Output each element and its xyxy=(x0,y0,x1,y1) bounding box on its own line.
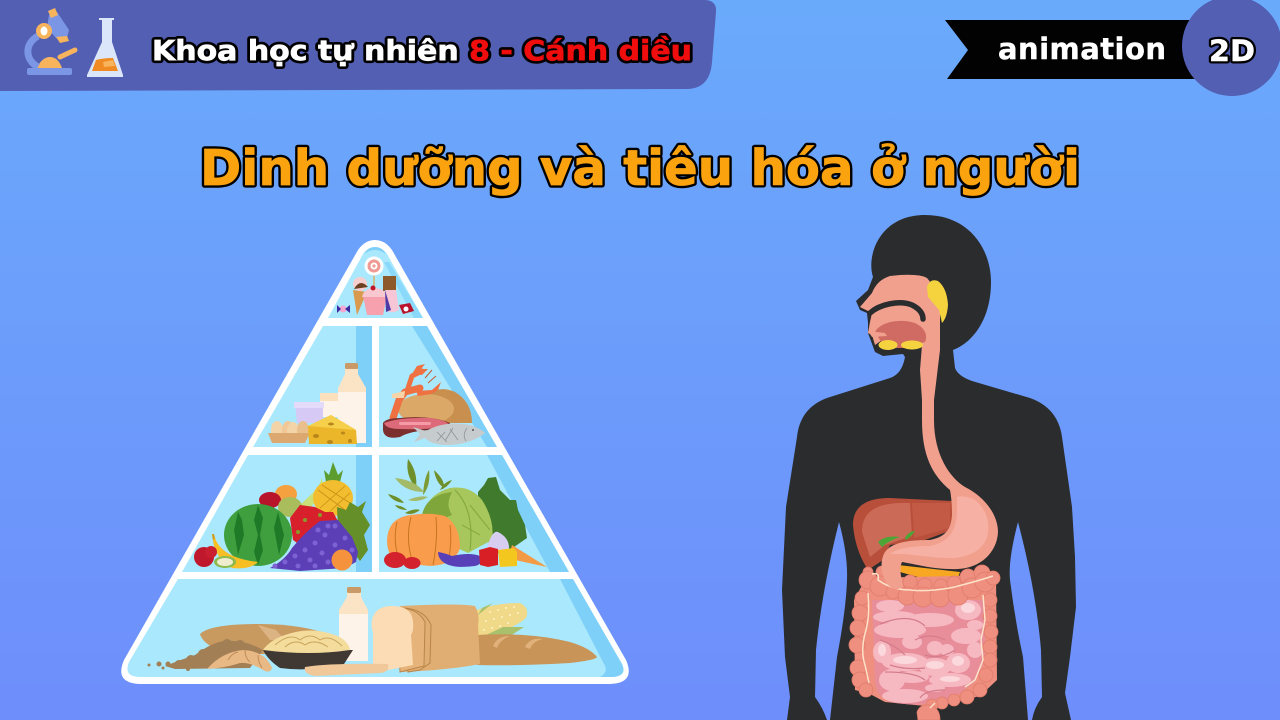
tier 2 right protein xyxy=(379,326,497,447)
ribbon xyxy=(945,20,1200,79)
board slice xyxy=(305,664,388,676)
tongue xyxy=(875,321,926,348)
pancreas xyxy=(898,565,960,579)
title: Dinh dưỡng và tiêu hóa ở người xyxy=(200,140,1080,197)
pyramid frame xyxy=(121,240,629,684)
large intestine xyxy=(849,565,1000,720)
header banner xyxy=(0,0,716,91)
ribbon label: animation xyxy=(998,32,1166,66)
large intestine underlay xyxy=(854,575,997,707)
body silhouette xyxy=(782,215,1076,720)
grains xyxy=(148,639,263,671)
croissant xyxy=(207,650,272,672)
baguette xyxy=(477,634,597,665)
header text: Khoa học tự nhiên 8 - Cánh diều xyxy=(152,34,692,67)
human body with digestive system xyxy=(782,215,1076,720)
small intestine xyxy=(872,600,985,705)
liver xyxy=(853,498,952,570)
2D label: 2D xyxy=(1209,34,1255,68)
tier 3 right vegetables xyxy=(379,455,569,572)
header text: Khoa học tự nhiên 8 - Cánh diều xyxy=(152,34,692,67)
bottle xyxy=(339,592,368,661)
2D label: 2D xyxy=(1209,34,1255,68)
food pyramid xyxy=(121,240,629,684)
tier 1 sweets xyxy=(328,247,423,318)
animation 2D badge xyxy=(945,0,1280,96)
title: Dinh dưỡng và tiêu hóa ở người xyxy=(200,140,1080,197)
circle xyxy=(1182,0,1280,96)
icon: microscope xyxy=(27,8,75,75)
intestine highlights xyxy=(863,574,993,708)
icon: flask xyxy=(87,19,123,77)
bread loaf xyxy=(400,604,480,672)
appendix xyxy=(917,705,940,720)
tier 4 grains xyxy=(127,579,624,677)
esophagus and stomach xyxy=(882,395,998,589)
loaf ciabatta xyxy=(200,624,342,654)
tier 3 left fruit xyxy=(182,455,372,572)
mouth and pharynx xyxy=(860,275,948,400)
gallbladder xyxy=(878,531,915,547)
salivary glands xyxy=(927,280,948,323)
corn xyxy=(477,603,527,636)
tier 2 left dairy xyxy=(253,326,372,447)
noodle bowl xyxy=(263,650,353,669)
